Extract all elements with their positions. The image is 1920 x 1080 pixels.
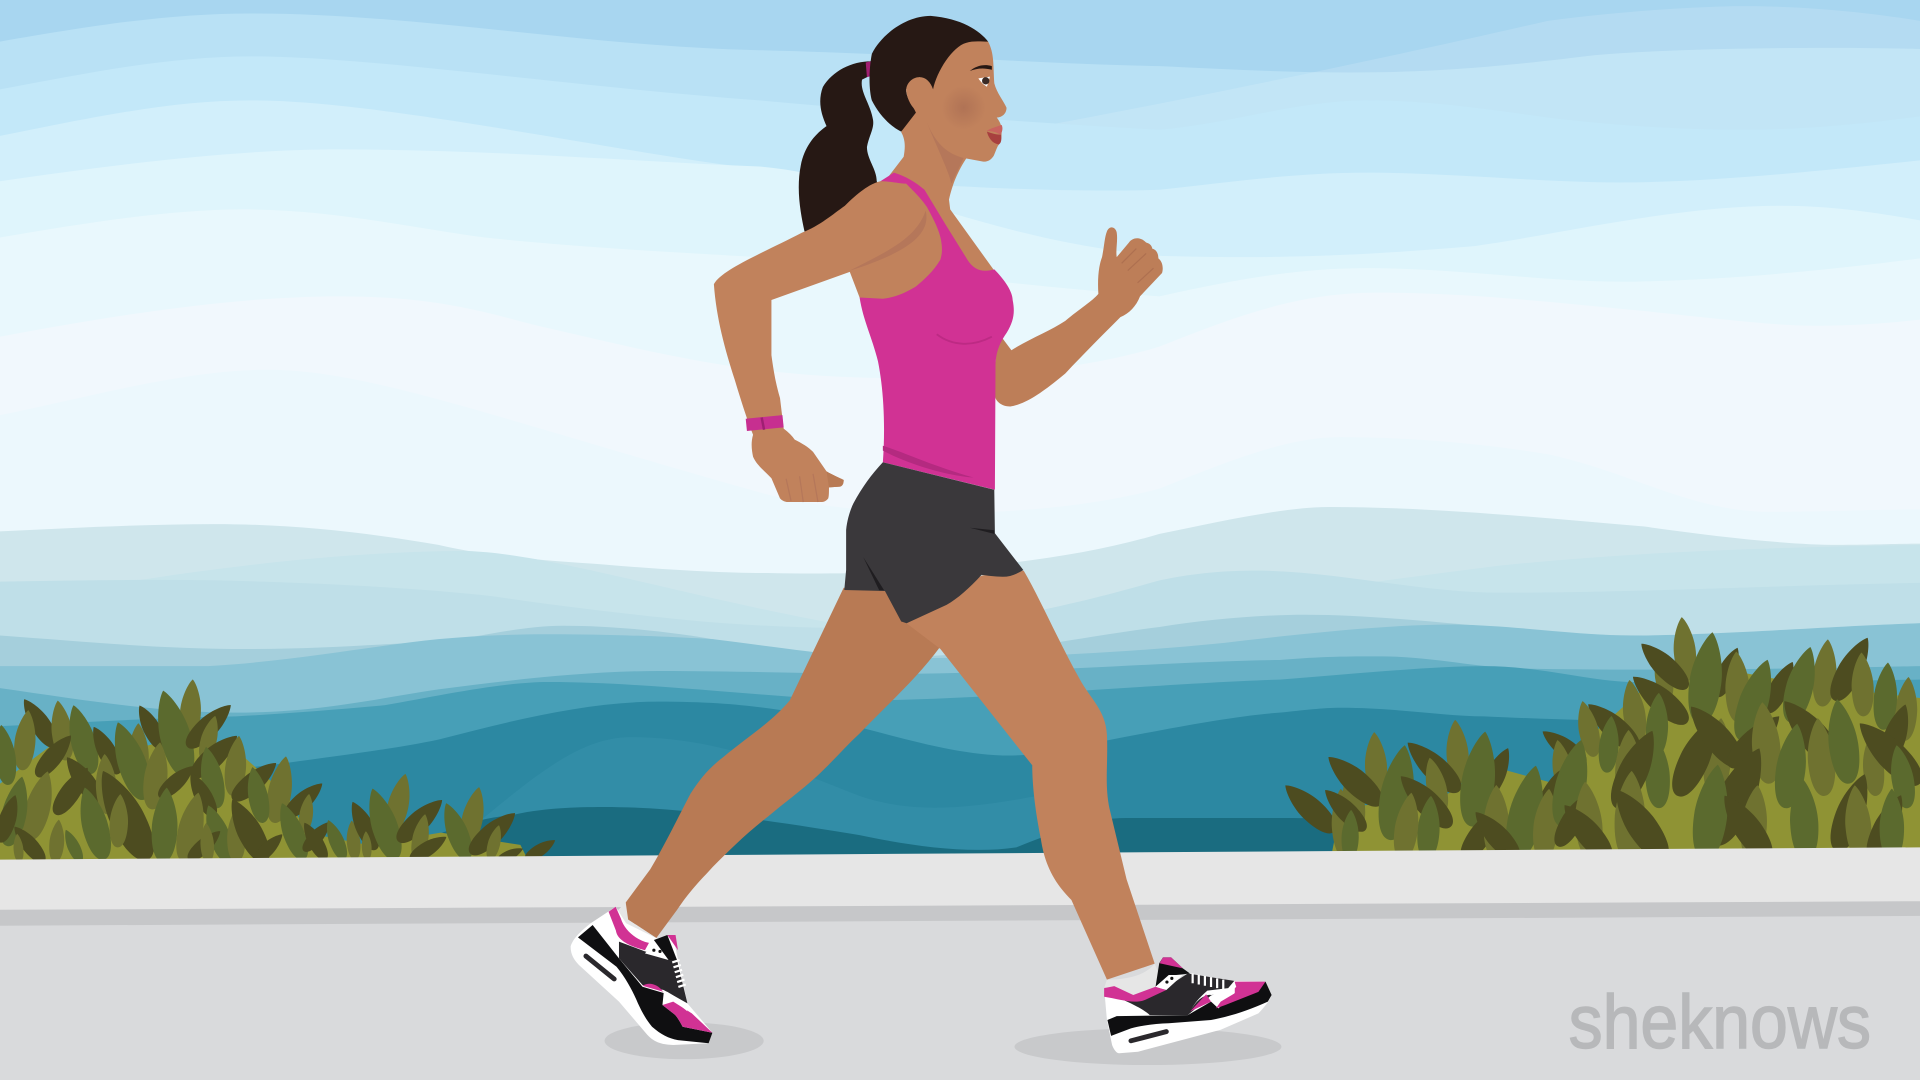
cheek blush — [942, 86, 986, 130]
sky background — [0, 0, 1920, 588]
knuckle creases — [786, 474, 818, 502]
iris — [982, 77, 989, 84]
front leg — [900, 571, 1155, 980]
hem fold — [883, 446, 973, 478]
rear shoe — [571, 907, 712, 1045]
upper lip — [987, 125, 1002, 135]
arm crease — [850, 211, 926, 271]
hand finger creases — [1122, 249, 1153, 283]
eyebrow — [970, 65, 992, 71]
top fold lines — [937, 334, 992, 344]
logo: sheknows: sheknows — [1569, 980, 1871, 1065]
rear leg — [625, 588, 940, 938]
road — [0, 847, 1920, 1080]
left bush — [0, 679, 558, 869]
front shoe — [1104, 957, 1272, 1053]
shadow: rear shoe — [605, 1022, 764, 1059]
near arm and shoulder — [714, 181, 942, 502]
hair band — [866, 61, 872, 77]
tank top — [860, 173, 1014, 490]
rear sock — [616, 902, 656, 945]
hair — [870, 16, 988, 132]
lower lip — [987, 132, 1001, 144]
thumb shade — [827, 471, 844, 487]
wristband detail — [762, 418, 764, 430]
right bush — [1277, 616, 1920, 869]
ponytail — [799, 61, 888, 239]
ear — [906, 77, 933, 111]
far arm — [994, 227, 1163, 407]
sea waves — [0, 507, 1920, 882]
eye — [978, 77, 990, 87]
wristband — [746, 415, 784, 431]
runner figure — [625, 16, 1163, 980]
face — [916, 37, 1007, 162]
neck shadow — [927, 122, 964, 184]
front sock — [1104, 964, 1163, 999]
neck and chest — [888, 104, 994, 276]
shorts folds — [863, 528, 994, 590]
shadow: front shoe — [1014, 1028, 1281, 1065]
shorts — [844, 462, 1023, 623]
